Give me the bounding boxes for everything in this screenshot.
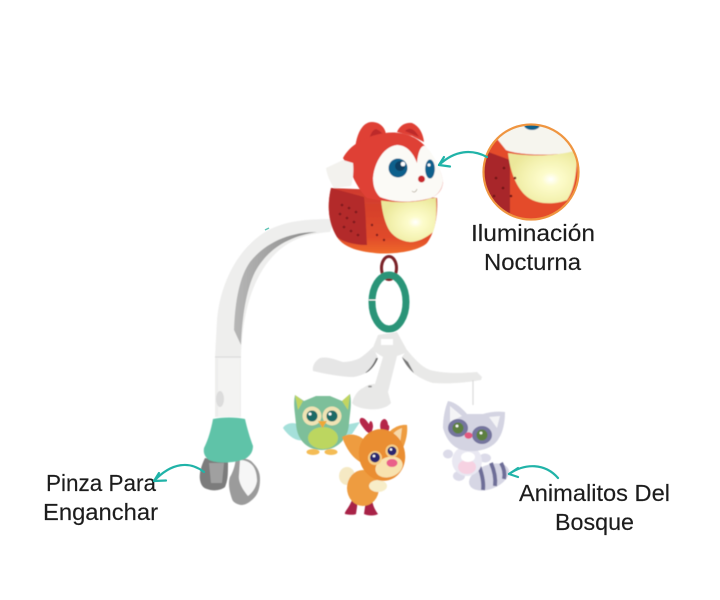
fox ears bbox=[355, 122, 386, 150]
fox character bbox=[326, 122, 443, 254]
label: Pinza Para Enganchar bbox=[43, 470, 158, 525]
label: Animalitos Del Bosque: Animalitos Del bbox=[519, 480, 670, 506]
fox speaker dots bbox=[339, 204, 385, 241]
arrow: clip to label bbox=[154, 465, 204, 481]
hanging rings bbox=[369, 256, 406, 329]
fox head bbox=[343, 133, 443, 202]
arrow: raccoon to label bbox=[509, 466, 558, 478]
owl toy bbox=[283, 394, 360, 455]
fox belly light bbox=[381, 198, 436, 242]
small teal mark bbox=[265, 228, 269, 230]
fox tail bbox=[326, 160, 353, 188]
clip: pinza bbox=[200, 418, 260, 505]
label: Iluminación Nocturna: Nocturna bbox=[484, 249, 581, 275]
label: Iluminación Nocturna bbox=[471, 220, 595, 275]
fox eyes bbox=[388, 158, 408, 178]
deer toy bbox=[339, 418, 411, 516]
magnifier: night light detail bbox=[483, 120, 580, 225]
fox nose bbox=[418, 176, 425, 182]
fox dark side panel bbox=[329, 188, 367, 245]
label: Pinza Para Enganchar: Enganchar bbox=[43, 499, 158, 525]
arrow: fox to magnifier bbox=[439, 152, 487, 166]
label: Pinza Para Enganchar: Pinza Para bbox=[46, 470, 156, 496]
label: Animalitos Del Bosque bbox=[519, 480, 670, 535]
raccoon toy bbox=[443, 401, 513, 496]
fox face bbox=[373, 145, 443, 202]
arm of the mobile bbox=[215, 219, 335, 417]
label: Iluminación Nocturna: Iluminación bbox=[471, 220, 595, 246]
fox body bbox=[329, 188, 437, 254]
label: Animalitos Del Bosque: Bosque bbox=[555, 509, 634, 535]
tripod hanger bbox=[313, 332, 482, 409]
